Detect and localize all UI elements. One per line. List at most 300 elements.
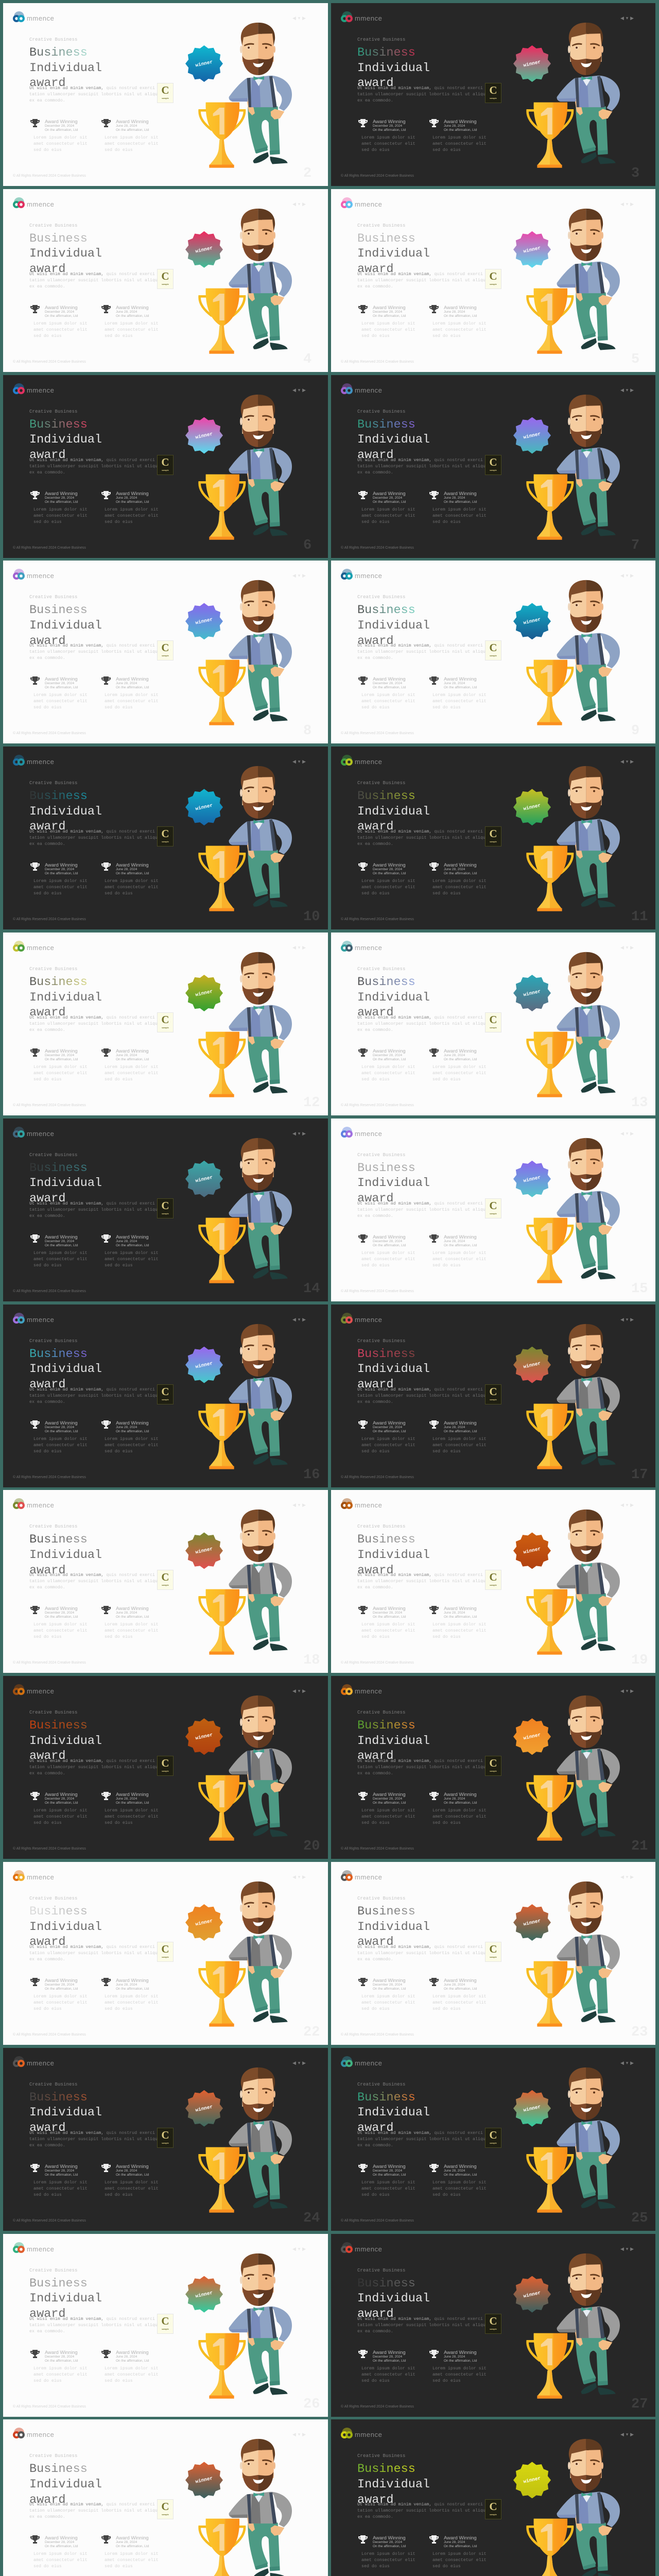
badge bbox=[185, 789, 223, 825]
page number: 15 bbox=[631, 1281, 648, 1297]
stamp bbox=[485, 1012, 501, 1032]
stamp: C bbox=[161, 270, 169, 282]
page number: 3 bbox=[631, 166, 639, 181]
logo bbox=[341, 1314, 392, 1326]
award 2: June 28, 2024 bbox=[116, 1797, 137, 1801]
award 1 bbox=[358, 304, 425, 341]
footer: © All Rights Reserved 2024 Creative Business bbox=[341, 174, 414, 178]
award 1: amet consectetur elit bbox=[361, 885, 415, 890]
paragraph: Ut wisi enim ad minim veniam, quis nostrud exerci bbox=[29, 1015, 155, 1020]
award 2: Award Winning bbox=[444, 1048, 477, 1054]
paragraph bbox=[357, 457, 491, 476]
award 2: Lorem ipsum dolor sit bbox=[105, 1808, 159, 1813]
title: Individual bbox=[29, 2478, 102, 2492]
paragraph: ex ea commodo. bbox=[357, 1214, 393, 1218]
footer: © All Rights Reserved 2024 Creative Business bbox=[13, 2405, 86, 2409]
award 1: On the affirmation, Ltd bbox=[373, 1058, 406, 1061]
title: award bbox=[29, 2121, 66, 2135]
illustration: man bbox=[556, 208, 620, 351]
award 2: Award Winning bbox=[116, 1978, 149, 1984]
page number: 27 bbox=[631, 2397, 648, 2412]
badge bbox=[185, 2462, 223, 2498]
award 2: On the affirmation, Ltd bbox=[444, 2359, 477, 2363]
award 1: sed do eius bbox=[361, 2007, 390, 2011]
stamp: C bbox=[161, 456, 169, 468]
badge bbox=[185, 417, 223, 454]
award 2: Lorem ipsum dolor sit bbox=[105, 879, 159, 884]
logo bbox=[341, 2058, 392, 2069]
award 1: sed do eius bbox=[361, 1449, 390, 1454]
award 1 bbox=[358, 1420, 425, 1456]
badge: winner bbox=[523, 2104, 541, 2113]
title: Individual bbox=[357, 1920, 430, 1934]
award 2 bbox=[429, 2535, 496, 2571]
logo: mmence bbox=[27, 1873, 54, 1881]
award 2: June 28, 2024 bbox=[444, 868, 465, 871]
award 1: sed do eius bbox=[361, 1263, 390, 1268]
stamp: sample bbox=[490, 1212, 497, 1215]
logo bbox=[341, 2429, 392, 2441]
award 2: Lorem ipsum dolor sit bbox=[432, 2552, 487, 2556]
illustration: trophy bbox=[525, 1217, 574, 1284]
award 1 bbox=[30, 490, 97, 527]
award 1: December 28, 2024 bbox=[45, 1240, 74, 1243]
title: award bbox=[357, 2307, 394, 2321]
title bbox=[357, 231, 430, 277]
award 2 bbox=[429, 1048, 496, 1084]
badge bbox=[185, 45, 223, 82]
social icons: ◀ ▾ ▶ bbox=[620, 759, 634, 765]
paragraph: Ut wisi enim ad minim veniam, quis nostrud exerci bbox=[29, 1945, 155, 1950]
paragraph: Ut wisi enim ad minim veniam, quis nostrud exerci bbox=[357, 1201, 483, 1206]
award 1: Lorem ipsum dolor sit bbox=[33, 2552, 88, 2556]
award 1: December 28, 2024 bbox=[373, 310, 402, 314]
title: award bbox=[357, 262, 394, 276]
award 1: amet consectetur elit bbox=[33, 2558, 88, 2563]
award 2: Award Winning bbox=[116, 1606, 149, 1612]
award 1 bbox=[30, 2349, 97, 2385]
award 1: amet consectetur elit bbox=[33, 328, 88, 332]
badge bbox=[513, 789, 551, 825]
stamp: C bbox=[161, 1199, 169, 1212]
logo bbox=[13, 570, 64, 582]
badge: winner bbox=[523, 245, 541, 254]
stamp: C bbox=[489, 1385, 497, 1398]
logo bbox=[341, 1500, 392, 1511]
award 1: On the affirmation, Ltd bbox=[373, 872, 406, 875]
page number: 10 bbox=[303, 909, 320, 925]
eyebrow: Creative Business bbox=[29, 2453, 78, 2459]
social icons: ◀ ▾ ▶ bbox=[292, 573, 306, 579]
paragraph bbox=[29, 2502, 163, 2520]
title bbox=[357, 2276, 430, 2321]
award 1: sed do eius bbox=[361, 520, 390, 524]
award 2: June 28, 2024 bbox=[116, 1983, 137, 1987]
award 1: sed do eius bbox=[33, 520, 62, 524]
award 2: On the affirmation, Ltd bbox=[444, 1244, 477, 1247]
award 1: amet consectetur elit bbox=[33, 1815, 88, 1819]
paragraph: ex ea commodo. bbox=[29, 1028, 65, 1032]
award 2: sed do eius bbox=[105, 2564, 133, 2569]
paragraph: tation ullamcorper suscipit lobortis nisl ut aliquip bbox=[357, 92, 491, 97]
logo: mmence bbox=[355, 1316, 382, 1324]
title: award bbox=[357, 448, 394, 462]
award 1: sed do eius bbox=[361, 705, 390, 710]
award 2: June 28, 2024 bbox=[116, 496, 137, 500]
award 1: On the affirmation, Ltd bbox=[45, 1987, 78, 1991]
award 1: Lorem ipsum dolor sit bbox=[361, 1808, 415, 1813]
award 2: On the affirmation, Ltd bbox=[444, 1987, 477, 1991]
award 1: December 28, 2024 bbox=[45, 2169, 74, 2173]
award 2: Lorem ipsum dolor sit bbox=[105, 1437, 159, 1442]
stamp bbox=[157, 269, 174, 289]
illustration: trophy bbox=[525, 1403, 574, 1470]
badge: winner bbox=[195, 617, 213, 626]
illustration: man bbox=[228, 1695, 292, 1838]
award 2: June 28, 2024 bbox=[116, 2169, 137, 2173]
award 2: June 28, 2024 bbox=[116, 1426, 137, 1429]
logo: mmence bbox=[27, 200, 54, 208]
eyebrow: Creative Business bbox=[29, 409, 78, 414]
title bbox=[357, 975, 430, 1021]
panel: slide 26 bbox=[3, 2234, 328, 2417]
badge: winner bbox=[195, 2476, 213, 2485]
stamp bbox=[157, 2499, 174, 2519]
title: award bbox=[29, 262, 66, 276]
paragraph bbox=[29, 1944, 163, 1963]
award 1: December 28, 2024 bbox=[373, 2169, 402, 2173]
award 2: amet consectetur elit bbox=[432, 2001, 487, 2005]
paragraph bbox=[357, 1944, 491, 1963]
eyebrow: Creative Business bbox=[29, 1710, 78, 1715]
illustration: trophy bbox=[197, 2332, 246, 2399]
award 2 bbox=[429, 1791, 496, 1827]
paragraph: Ut wisi enim ad minim veniam, quis nostrud exerci bbox=[357, 1945, 483, 1950]
award 2: sed do eius bbox=[105, 1449, 133, 1454]
illustration: trophy bbox=[525, 659, 574, 726]
illustration: trophy bbox=[197, 2146, 246, 2213]
badge: winner bbox=[195, 1174, 213, 1183]
award 1: Lorem ipsum dolor sit bbox=[33, 507, 88, 512]
title: award bbox=[29, 2307, 66, 2321]
badge bbox=[185, 1718, 223, 1755]
panel: slide 28 bbox=[3, 2419, 328, 2576]
badge: winner bbox=[523, 1174, 541, 1183]
social icons: ◀ ▾ ▶ bbox=[292, 759, 306, 765]
title: Business bbox=[357, 418, 415, 432]
award 2: amet consectetur elit bbox=[432, 142, 487, 146]
title bbox=[357, 1347, 430, 1392]
paragraph: ex ea commodo. bbox=[357, 470, 393, 475]
logo bbox=[341, 1686, 392, 1697]
paragraph: ex ea commodo. bbox=[357, 1028, 393, 1032]
stamp bbox=[485, 1570, 501, 1590]
eyebrow: Creative Business bbox=[29, 1153, 78, 1158]
award 2: Lorem ipsum dolor sit bbox=[432, 1251, 487, 1256]
award 2: Award Winning bbox=[444, 1792, 477, 1798]
badge bbox=[513, 45, 551, 82]
stamp: C bbox=[489, 641, 497, 654]
award 2: amet consectetur elit bbox=[105, 1815, 159, 1819]
paragraph: ex ea commodo. bbox=[29, 1957, 65, 1962]
illustration: man bbox=[556, 580, 620, 722]
eyebrow: Creative Business bbox=[357, 1153, 406, 1158]
logo: mmence bbox=[355, 572, 382, 580]
title: Business bbox=[357, 603, 415, 617]
award 1: Lorem ipsum dolor sit bbox=[361, 2552, 415, 2556]
paragraph: tation ullamcorper suscipit lobortis nisl ut aliquip bbox=[357, 836, 491, 840]
badge: winner bbox=[523, 989, 541, 997]
award 1 bbox=[358, 862, 425, 898]
stamp: C bbox=[489, 1013, 497, 1026]
stamp: C bbox=[489, 84, 497, 96]
stamp: sample bbox=[162, 2328, 169, 2330]
title: award bbox=[357, 2121, 394, 2135]
award 2: June 28, 2024 bbox=[444, 1240, 465, 1243]
award 2: Lorem ipsum dolor sit bbox=[432, 693, 487, 698]
award 1: Lorem ipsum dolor sit bbox=[361, 2180, 415, 2185]
award 2: June 28, 2024 bbox=[444, 2540, 465, 2544]
paragraph bbox=[357, 2130, 491, 2149]
award 2: June 28, 2024 bbox=[444, 1611, 465, 1615]
award 2: On the affirmation, Ltd bbox=[116, 128, 149, 132]
logo bbox=[13, 1872, 64, 1883]
stamp: C bbox=[161, 641, 169, 654]
paragraph bbox=[29, 1572, 163, 1591]
eyebrow: Creative Business bbox=[357, 2268, 406, 2273]
title: Business bbox=[357, 1719, 415, 1733]
badge: winner bbox=[195, 989, 213, 997]
award 2: sed do eius bbox=[105, 2193, 133, 2197]
stamp: C bbox=[489, 2315, 497, 2327]
panel: slide 22 bbox=[3, 1862, 328, 2045]
award 1 bbox=[30, 118, 97, 155]
title: Individual bbox=[357, 247, 430, 261]
paragraph: Ut wisi enim ad minim veniam, quis nostrud exerci bbox=[357, 458, 483, 463]
title: award bbox=[29, 1564, 66, 1578]
footer: © All Rights Reserved 2024 Creative Business bbox=[341, 2033, 414, 2037]
title: award bbox=[357, 1564, 394, 1578]
paragraph: ex ea commodo. bbox=[357, 284, 393, 289]
logo: mmence bbox=[27, 944, 54, 952]
illustration: man bbox=[228, 580, 292, 722]
panel: slide 17 bbox=[331, 1304, 655, 1487]
footer: © All Rights Reserved 2024 Creative Business bbox=[13, 1661, 86, 1665]
badge: winner bbox=[195, 1732, 213, 1741]
award 1: amet consectetur elit bbox=[33, 2001, 88, 2005]
social icons: ◀ ▾ ▶ bbox=[620, 945, 634, 951]
award 2: On the affirmation, Ltd bbox=[116, 686, 149, 689]
title bbox=[29, 603, 102, 649]
badge bbox=[185, 975, 223, 1011]
paragraph bbox=[29, 1015, 163, 1033]
award 1: On the affirmation, Ltd bbox=[45, 2359, 78, 2363]
logo bbox=[13, 942, 64, 954]
award 1: Award Winning bbox=[45, 1792, 78, 1798]
social icons: ◀ ▾ ▶ bbox=[292, 1689, 306, 1694]
paragraph: tation ullamcorper suscipit lobortis nisl ut aliquip bbox=[29, 2137, 163, 2142]
stamp bbox=[157, 1756, 174, 1776]
award 1: sed do eius bbox=[361, 2379, 390, 2383]
logo: mmence bbox=[27, 2245, 54, 2253]
award 1: amet consectetur elit bbox=[33, 2187, 88, 2191]
badge: winner bbox=[523, 1918, 541, 1927]
title bbox=[29, 1347, 102, 1392]
award 2: Award Winning bbox=[116, 2350, 149, 2355]
eyebrow: Creative Business bbox=[29, 223, 78, 228]
page number: 12 bbox=[303, 1095, 320, 1111]
title: Business bbox=[29, 789, 88, 803]
page number: 7 bbox=[631, 538, 639, 553]
award 2: amet consectetur elit bbox=[432, 1071, 487, 1076]
stamp bbox=[485, 826, 501, 846]
award 2: sed do eius bbox=[432, 2564, 461, 2569]
stamp: sample bbox=[162, 283, 169, 285]
illustration: man bbox=[556, 1509, 620, 1652]
badge bbox=[513, 417, 551, 454]
award 2: Award Winning bbox=[116, 305, 149, 311]
award 2: amet consectetur elit bbox=[432, 514, 487, 518]
award 1: amet consectetur elit bbox=[33, 2372, 88, 2377]
award 1: Award Winning bbox=[373, 676, 406, 682]
award 2: Lorem ipsum dolor sit bbox=[105, 1065, 159, 1070]
logo bbox=[13, 2058, 64, 2069]
badge bbox=[513, 1904, 551, 1941]
award 2: June 28, 2024 bbox=[116, 682, 137, 685]
title: Individual bbox=[357, 1734, 430, 1748]
eyebrow: Creative Business bbox=[29, 37, 78, 42]
award 1: Award Winning bbox=[45, 491, 78, 497]
title bbox=[357, 2090, 430, 2136]
eyebrow: Creative Business bbox=[357, 409, 406, 414]
award 1: Award Winning bbox=[373, 862, 406, 868]
panel: slide 12 bbox=[3, 933, 328, 1115]
page number: 14 bbox=[303, 1281, 320, 1297]
illustration: trophy bbox=[525, 473, 574, 540]
award 2 bbox=[101, 1791, 168, 1827]
award 1: sed do eius bbox=[33, 2007, 62, 2011]
award 1: amet consectetur elit bbox=[361, 2558, 415, 2563]
award 2: Lorem ipsum dolor sit bbox=[105, 321, 159, 326]
title: award bbox=[29, 820, 66, 834]
badge bbox=[513, 975, 551, 1011]
award 1: sed do eius bbox=[361, 891, 390, 896]
title bbox=[29, 789, 102, 835]
award 2: On the affirmation, Ltd bbox=[444, 1615, 477, 1619]
award 1: December 28, 2024 bbox=[45, 1611, 74, 1615]
title bbox=[29, 417, 102, 463]
illustration: man bbox=[228, 766, 292, 908]
stamp bbox=[157, 640, 174, 660]
illustration: man bbox=[556, 22, 620, 165]
illustration: trophy bbox=[197, 1217, 246, 1284]
page number: 19 bbox=[631, 1653, 648, 1668]
award 1: Lorem ipsum dolor sit bbox=[361, 1251, 415, 1256]
illustration: man bbox=[556, 2438, 620, 2576]
paragraph: tation ullamcorper suscipit lobortis nisl ut aliquip bbox=[29, 1951, 163, 1956]
illustration: man bbox=[556, 2253, 620, 2396]
panel: slide 7 bbox=[331, 375, 655, 558]
title bbox=[29, 2276, 102, 2321]
award 2 bbox=[101, 676, 168, 712]
title: Individual bbox=[29, 1920, 102, 1934]
award 1: amet consectetur elit bbox=[33, 1257, 88, 1262]
stamp: C bbox=[489, 2129, 497, 2141]
paragraph: Ut wisi enim ad minim veniam, quis nostrud exerci bbox=[29, 829, 155, 834]
award 2: On the affirmation, Ltd bbox=[116, 314, 149, 318]
award 2: June 28, 2024 bbox=[116, 124, 137, 128]
award 1: amet consectetur elit bbox=[361, 328, 415, 332]
paragraph: tation ullamcorper suscipit lobortis nisl ut aliquip bbox=[29, 1022, 163, 1026]
footer: © All Rights Reserved 2024 Creative Business bbox=[341, 1661, 414, 1665]
title bbox=[357, 1718, 430, 1764]
panel: slide 6 bbox=[3, 375, 328, 558]
award 1: sed do eius bbox=[33, 1077, 62, 1082]
award 1: Award Winning bbox=[373, 1792, 406, 1798]
paragraph: ex ea commodo. bbox=[29, 842, 65, 846]
award 2 bbox=[429, 2163, 496, 2199]
title: Individual bbox=[29, 1362, 102, 1376]
logo bbox=[13, 1500, 64, 1511]
illustration: man bbox=[556, 2067, 620, 2210]
logo: mmence bbox=[27, 572, 54, 580]
title: award bbox=[357, 1006, 394, 1020]
award 2: sed do eius bbox=[105, 148, 133, 152]
panel: slide 23 bbox=[331, 1862, 655, 2045]
panel: slide 4 bbox=[3, 189, 328, 372]
logo bbox=[341, 1128, 392, 1140]
award 1: sed do eius bbox=[33, 1635, 62, 1639]
award 2 bbox=[429, 490, 496, 527]
award 2: sed do eius bbox=[105, 520, 133, 524]
award 2: amet consectetur elit bbox=[105, 2558, 159, 2563]
logo bbox=[13, 2429, 64, 2441]
award 1: Lorem ipsum dolor sit bbox=[33, 1251, 88, 1256]
eyebrow: Creative Business bbox=[29, 1896, 78, 1901]
social icons: ◀ ▾ ▶ bbox=[292, 1503, 306, 1508]
title: Individual bbox=[29, 619, 102, 633]
award 1: amet consectetur elit bbox=[361, 1071, 415, 1076]
award 2: sed do eius bbox=[432, 705, 461, 710]
stamp bbox=[157, 1942, 174, 1962]
title: Individual bbox=[29, 1176, 102, 1190]
badge bbox=[185, 1161, 223, 1197]
logo bbox=[341, 570, 392, 582]
award 1: December 28, 2024 bbox=[373, 1611, 402, 1615]
stamp: C bbox=[161, 1571, 169, 1583]
title: Business bbox=[29, 1161, 88, 1175]
award 2: June 28, 2024 bbox=[444, 2355, 465, 2359]
stamp: C bbox=[161, 84, 169, 96]
award 2: June 28, 2024 bbox=[116, 1611, 137, 1615]
award 2 bbox=[429, 1234, 496, 1270]
badge: winner bbox=[195, 2290, 213, 2299]
illustration: trophy bbox=[525, 2332, 574, 2399]
footer: © All Rights Reserved 2024 Creative Business bbox=[13, 2033, 86, 2037]
badge: winner bbox=[195, 431, 213, 440]
award 1: amet consectetur elit bbox=[33, 142, 88, 146]
paragraph bbox=[29, 272, 163, 290]
award 1 bbox=[30, 1791, 97, 1827]
award 1: sed do eius bbox=[33, 2193, 62, 2197]
panel: slide 24 bbox=[3, 2048, 328, 2231]
award 1: On the affirmation, Ltd bbox=[45, 128, 78, 132]
award 2: amet consectetur elit bbox=[432, 2372, 487, 2377]
award 1 bbox=[30, 862, 97, 898]
eyebrow: Creative Business bbox=[357, 1896, 406, 1901]
award 2: Lorem ipsum dolor sit bbox=[105, 1622, 159, 1627]
panel: slide 2 bbox=[3, 3, 328, 186]
